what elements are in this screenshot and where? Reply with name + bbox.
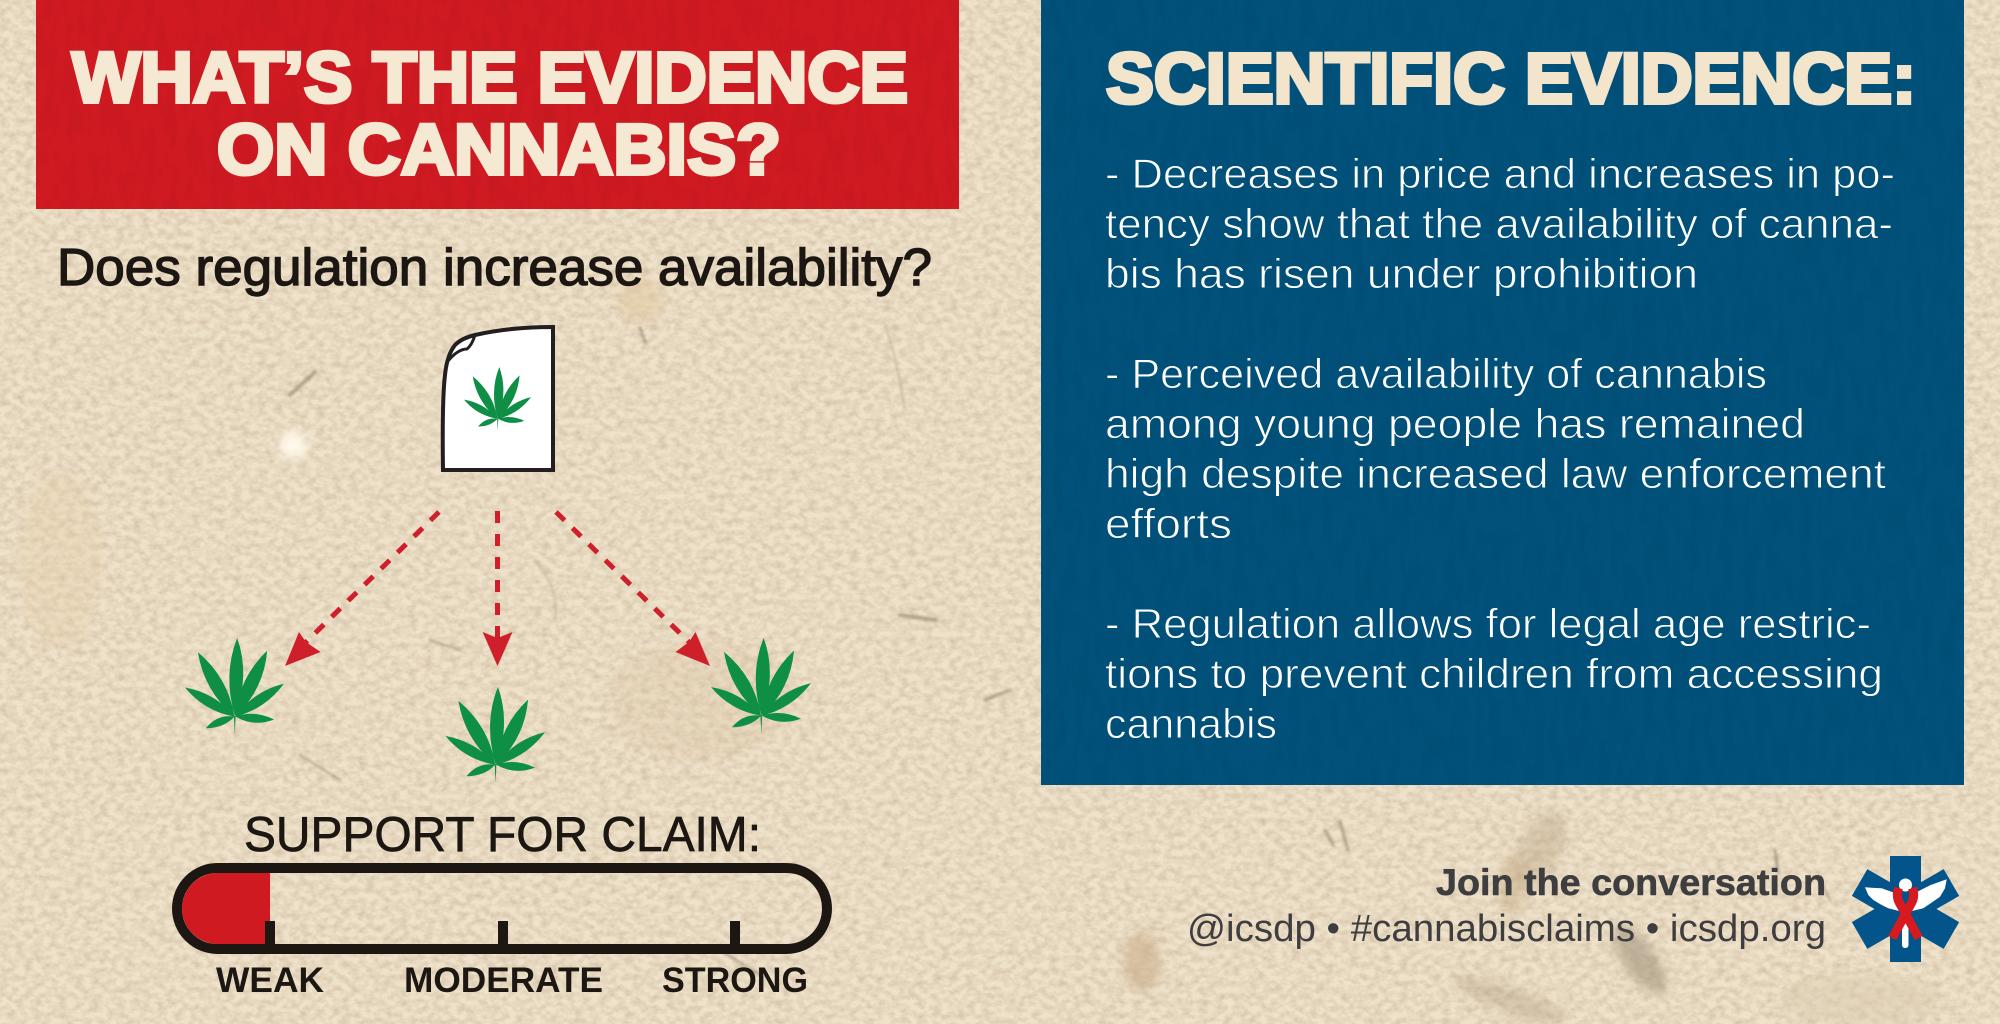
evidence point 2: among young people has remained bbox=[1105, 400, 1805, 447]
evidence point 1 bbox=[1105, 150, 1895, 297]
title: WHAT’S THE EVIDENCE bbox=[72, 39, 908, 118]
evidence point 2: - Perceived availability of cannabis bbox=[1105, 350, 1767, 397]
icon: left cannabis leaf bbox=[185, 638, 284, 735]
title bbox=[72, 39, 908, 190]
meter labels bbox=[216, 961, 808, 1000]
evidence point 3: tions to prevent children from accessing bbox=[1105, 650, 1883, 697]
icon: right cannabis leaf bbox=[711, 638, 811, 734]
meter heading: SUPPORT FOR CLAIM: bbox=[244, 808, 761, 862]
meter ticks bbox=[265, 921, 740, 946]
meter labels: MODERATE bbox=[404, 961, 603, 1000]
arrow: to left leaf bbox=[285, 512, 439, 666]
footer call to action: Join the conversation bbox=[1436, 862, 1826, 903]
support meter bbox=[177, 808, 827, 1000]
icon: regulation document with cannabis leaf bbox=[443, 327, 553, 470]
arrow: to centre leaf bbox=[483, 511, 512, 666]
footer call to action: @icsdp • #cannabisclaims • icsdp.org bbox=[1187, 908, 1826, 950]
evidence point 3 bbox=[1105, 600, 1883, 747]
evidence point 3: - Regulation allows for legal age restric- bbox=[1105, 600, 1871, 647]
meter labels: STRONG bbox=[662, 961, 808, 1000]
icon: ICSDP star of life logo bbox=[1852, 856, 1959, 962]
arrow: to right leaf bbox=[556, 512, 710, 666]
meter labels: WEAK bbox=[216, 961, 324, 1000]
evidence point 1: bis has risen under prohibition bbox=[1105, 250, 1698, 297]
icon: centre cannabis leaf bbox=[446, 687, 545, 783]
evidence point 2 bbox=[1105, 350, 1886, 547]
panel: title banner bbox=[36, 0, 959, 209]
evidence point 3: cannabis bbox=[1105, 700, 1277, 747]
evidence point 1: tency show that the availability of canna- bbox=[1105, 200, 1893, 247]
meter outline bbox=[177, 868, 827, 949]
evidence point 2: efforts bbox=[1105, 500, 1232, 547]
evidence point 2: high despite increased law enforcement bbox=[1105, 450, 1886, 497]
panel heading: SCIENTIFIC EVIDENCE: bbox=[1106, 40, 1916, 119]
title: ON CANNABIS? bbox=[217, 111, 781, 190]
question heading: Does regulation increase availability? bbox=[57, 239, 932, 297]
footer call to action bbox=[1187, 862, 1826, 950]
evidence point 1: - Decreases in price and increases in po- bbox=[1105, 150, 1895, 197]
panel: scientific evidence bbox=[1041, 0, 1964, 785]
meter fill: weak level bbox=[182, 873, 270, 944]
